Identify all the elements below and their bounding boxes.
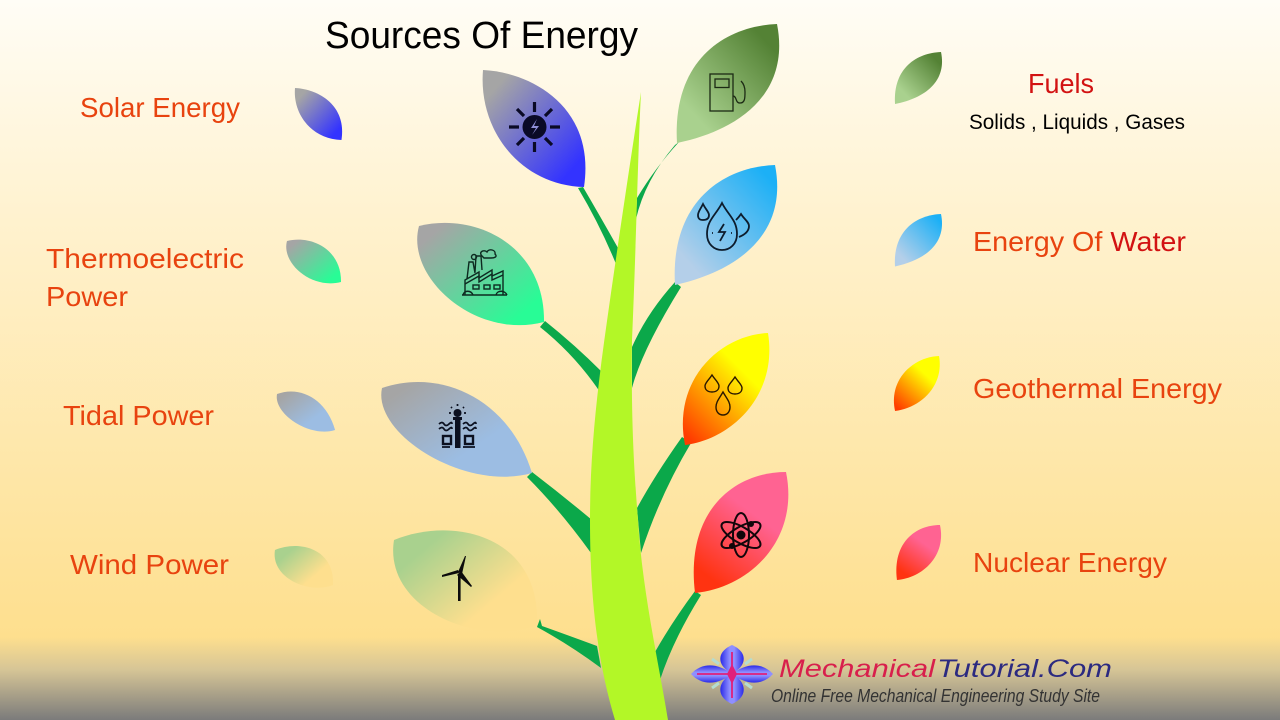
icon: wind turbine <box>442 556 472 601</box>
label: energy of water: Energy Of Water <box>973 226 1186 257</box>
title: Sources Of Energy <box>325 15 638 57</box>
legend leaf: tidal <box>277 391 335 432</box>
icon: flower logo <box>691 645 773 704</box>
label: solar energy: Solar Energy <box>80 92 240 123</box>
leaf: nuclear energy <box>694 472 788 593</box>
legend leaf: water <box>895 214 942 266</box>
legend leaf: fuels <box>895 52 942 104</box>
label: thermoelectric power: Thermoelectric <box>46 243 244 274</box>
legend leaf: geothermal <box>894 356 940 411</box>
leaf: tidal power <box>381 382 532 477</box>
logo: mechanical tutorial <box>691 645 1112 706</box>
leaf: solar energy <box>483 70 585 187</box>
icon: three drops <box>705 375 742 415</box>
label: wind power: Wind Power <box>70 549 229 580</box>
label: fuels: Fuels <box>1028 68 1094 99</box>
leaf: geothermal energy <box>683 333 769 445</box>
icon: water drops with bolt <box>698 203 749 250</box>
leaf: thermoelectric power <box>417 223 544 325</box>
logo: mechanical tutorial: Tutorial.Com <box>937 655 1112 683</box>
icon: sun with bolt <box>509 102 560 152</box>
label: fuel types: Solids , Liquids , Gases <box>969 111 1185 134</box>
legend leaf: solar <box>295 88 342 140</box>
plant stem <box>590 92 668 720</box>
leaf: fuels <box>677 24 779 143</box>
label: thermoelectric power: Power <box>46 281 128 312</box>
legend leaf: wind <box>275 546 333 588</box>
label: thermoelectric power <box>46 243 244 312</box>
icon: factory <box>462 250 507 295</box>
branches <box>527 142 701 680</box>
logo tagline: Online Free Mechanical Engineering Study Site <box>771 686 1100 706</box>
leaf: energy of water <box>675 165 777 285</box>
leaf: wind power <box>393 530 537 632</box>
icon: tidal plant <box>439 404 476 448</box>
label: geothermal energy: Geothermal Energy <box>973 373 1222 404</box>
icon: fuel pump <box>710 74 745 111</box>
label: nuclear energy: Nuclear Energy <box>973 547 1167 578</box>
label: tidal power: Tidal Power <box>63 400 214 431</box>
legend leaf: nuclear <box>896 525 941 580</box>
icon: atom <box>718 513 764 557</box>
logo wordmark: Mechanical <box>779 655 937 683</box>
legend leaf: thermoelectric <box>286 240 341 283</box>
